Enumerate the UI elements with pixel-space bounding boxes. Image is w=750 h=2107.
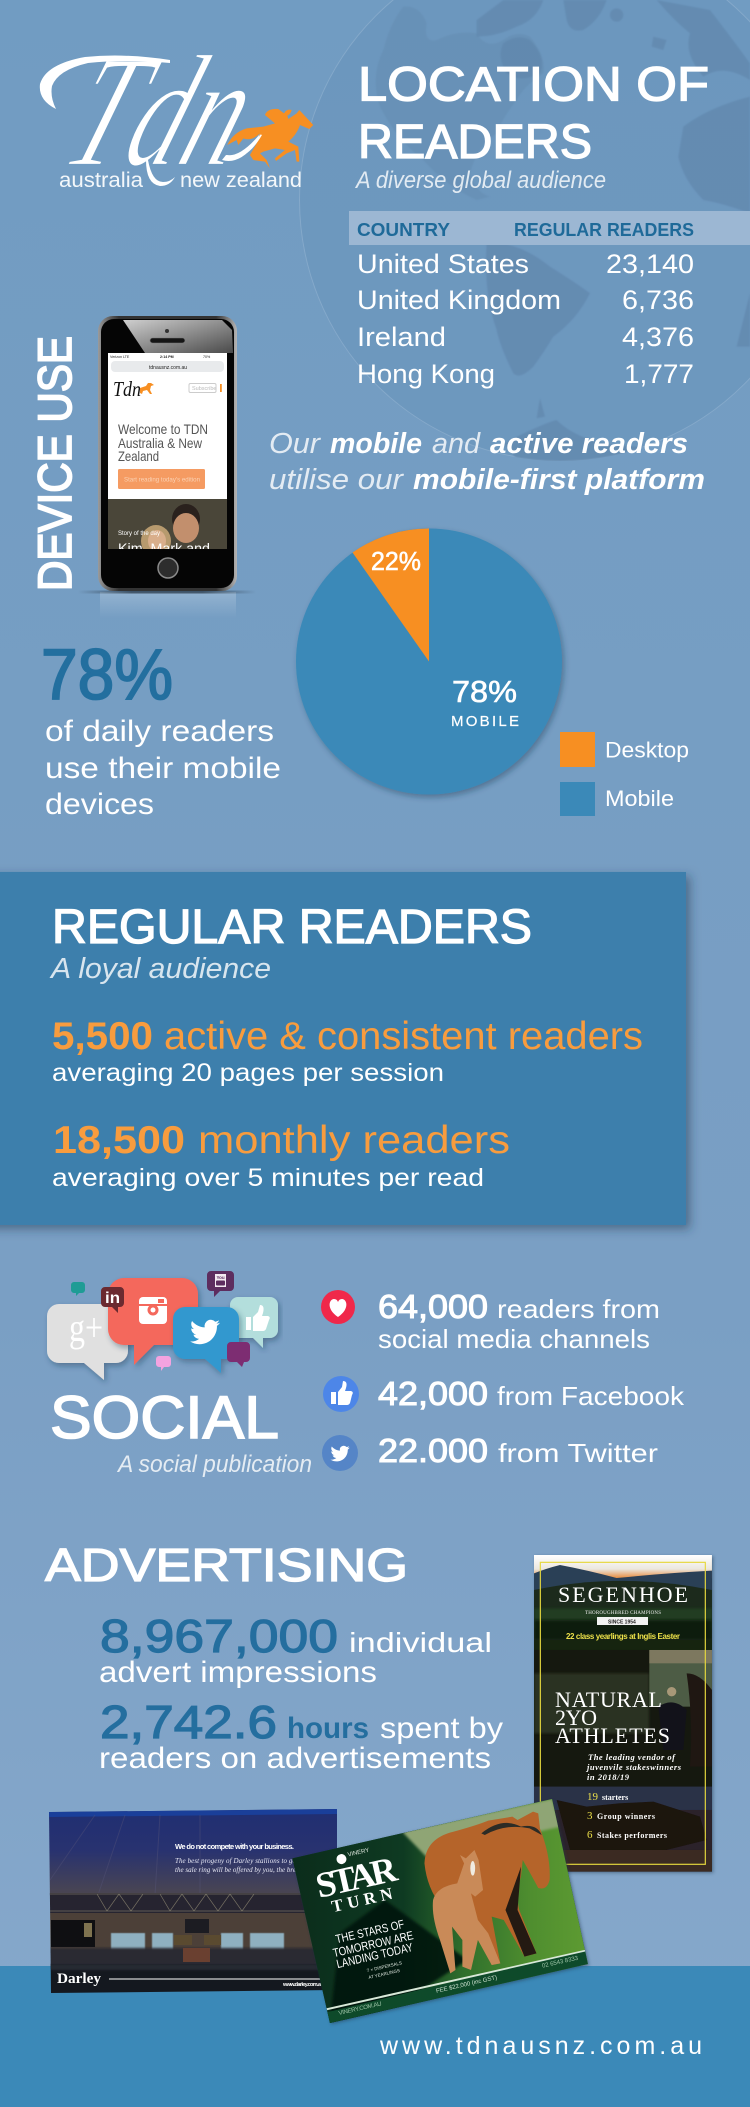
stat: active and consistent readers: averaging 20 pages per session bbox=[52, 1059, 444, 1087]
phone screen: Subscribe bbox=[192, 386, 216, 392]
table rows: United Kingdom bbox=[357, 285, 561, 315]
stat: advert impressions bbox=[99, 1610, 492, 1689]
darley text: We do not compete with your business. bbox=[175, 1842, 294, 1851]
pie label: 78% mobile bbox=[451, 674, 519, 730]
darley text: The best progeny of Darley stallions to go bbox=[175, 1857, 296, 1865]
heading: device use: DEVICE USE bbox=[28, 336, 81, 591]
segenhoe text: 3 bbox=[587, 1810, 593, 1822]
phone screen: Zealand bbox=[118, 448, 159, 464]
text: 22.000 from twitter bbox=[378, 1432, 658, 1469]
pie chart: desktop vs mobile bbox=[296, 528, 562, 794]
pie: desktop slice bbox=[352, 528, 429, 662]
callout: our mobile and active readers: and bbox=[432, 428, 481, 460]
stat: monthly readers: 18,500 bbox=[53, 1119, 185, 1162]
phone screen: tdnausnz.com.au bbox=[149, 365, 187, 371]
star turn text: VINERY.COM.AU bbox=[338, 2001, 382, 2017]
bubble: linkedin bbox=[101, 1287, 124, 1313]
table rows: 4,376 bbox=[622, 322, 694, 352]
table header bar: REGULAR READERS bbox=[514, 219, 694, 240]
logo wordmark: Tdn bbox=[45, 23, 280, 200]
stat: advert impressions: 8,967,000 bbox=[100, 1610, 338, 1662]
segenhoe text: ATHLETES bbox=[555, 1723, 670, 1748]
phone body bbox=[98, 316, 237, 591]
phone floor shadow bbox=[78, 590, 256, 594]
star turn text: FEE $22,000 (inc GST) bbox=[436, 1975, 498, 1995]
stat: 78% of daily readers bbox=[41, 636, 281, 821]
panel background bbox=[0, 872, 686, 1225]
segenhoe text: juvenvile stakeswinners bbox=[585, 1762, 682, 1772]
heading: regular readers: REGULAR READERS bbox=[52, 901, 532, 954]
bubble: google plus bbox=[47, 1304, 128, 1380]
heading: location of readers: READERS bbox=[358, 116, 592, 169]
phone screen: Start reading today's edition bbox=[124, 476, 200, 484]
pie: mobile slice bbox=[296, 528, 562, 794]
darley text: Darley bbox=[57, 1971, 101, 1987]
stat: monthly readers: averaging over 5 minutes per read bbox=[52, 1164, 484, 1192]
text: 64,000 readers bbox=[378, 1288, 660, 1354]
stat: 78% of daily readers: devices bbox=[45, 788, 154, 821]
darley text bbox=[57, 1842, 322, 1988]
callout: our mobile and active readers bbox=[269, 428, 705, 496]
heading: advertising: ADVERTISING bbox=[45, 1539, 408, 1591]
phone illustration bbox=[78, 316, 256, 618]
star turn text: THE STARS OF bbox=[334, 1917, 406, 1946]
bubble: pink bbox=[156, 1356, 171, 1371]
legend: Mobile bbox=[605, 786, 674, 811]
star turn text: AT YEARLINGS bbox=[368, 1968, 400, 1980]
stat: advert impressions: advert impressions bbox=[99, 1656, 377, 1689]
stat: hours on advertisements: readers on advertisements bbox=[99, 1742, 491, 1775]
advert: darley bbox=[45, 1805, 340, 1996]
bubble: instagram bbox=[108, 1278, 198, 1365]
logo: TDN australia new zealand bbox=[40, 23, 313, 200]
segenhoe text: 19 bbox=[587, 1791, 598, 1803]
darley text: the sale ring will be offered by you, the bre bbox=[175, 1866, 296, 1874]
icon: orange racehorse and jockey bbox=[227, 109, 313, 168]
advert: segenhoe bbox=[534, 1555, 712, 1872]
text: 64,000 readers: social media channels bbox=[378, 1324, 650, 1354]
legend bbox=[560, 732, 689, 816]
pie label: 78% mobile: MOBILE bbox=[451, 713, 519, 730]
icon: heart bbox=[321, 1290, 355, 1324]
stat: active and consistent readers bbox=[52, 1015, 643, 1087]
table rows: 23,140 bbox=[606, 249, 694, 279]
star turn text: VINERY bbox=[347, 1848, 370, 1858]
callout: our mobile and active readers: mobile-first platform bbox=[413, 464, 705, 496]
phone screen: Welcome to TDN bbox=[118, 421, 208, 437]
darley artwork bbox=[45, 1805, 340, 1996]
segenhoe text: SINCE 1954 bbox=[608, 1620, 636, 1626]
logo: new zealand: new zealand bbox=[180, 169, 302, 192]
text: 64,000 readers: readers from bbox=[497, 1294, 660, 1324]
heading: location of readers: LOCATION OF bbox=[358, 58, 709, 112]
phone screen: Tdn bbox=[113, 377, 141, 401]
phone screen: Australia & New bbox=[118, 435, 203, 451]
text: 22.000 from twitter: from Twitter bbox=[498, 1438, 658, 1468]
table rows: Ireland bbox=[357, 322, 446, 352]
star turn photo artwork bbox=[288, 1797, 592, 2027]
stat: advert impressions: individual bbox=[349, 1627, 492, 1658]
stat: hours on advertisements: spent by bbox=[380, 1712, 503, 1745]
stat: active and consistent readers: active & consistent readers bbox=[164, 1015, 643, 1058]
phone screen: Story of the day bbox=[118, 531, 160, 537]
stat: social media readers bbox=[321, 1288, 660, 1354]
footer: website url: www.tdnausnz.com.au bbox=[379, 2032, 702, 2060]
table header bar: COUNTRY bbox=[357, 219, 451, 240]
icon: facebook like bbox=[323, 1376, 359, 1412]
phone screen: 2:14 PM bbox=[160, 355, 174, 359]
footer band bbox=[0, 1966, 750, 2107]
globe map background bbox=[299, 0, 750, 467]
icon: twitter bbox=[322, 1435, 358, 1471]
text: 42,000 from facebook bbox=[378, 1375, 685, 1412]
bubble: twitter bbox=[173, 1307, 239, 1373]
star turn text bbox=[304, 1808, 580, 2017]
table header bar bbox=[349, 211, 750, 245]
phone screen: Verizon LTE bbox=[110, 355, 130, 359]
logo: australia: australia bbox=[59, 169, 143, 192]
bubble: thumbs up bbox=[230, 1297, 278, 1348]
callout: our mobile and active readers: active readers bbox=[490, 428, 688, 460]
stat: 78% of daily readers: of daily readers bbox=[45, 715, 274, 748]
pie label: 78% mobile: 78% bbox=[452, 674, 517, 709]
advert: star turn bbox=[288, 1797, 592, 2027]
phone reflection bbox=[100, 592, 236, 618]
segenhoe text: The leading vendor of bbox=[588, 1752, 676, 1762]
table rows bbox=[357, 249, 694, 389]
stat: monthly readers bbox=[52, 1119, 510, 1192]
segenhoe text: 2YO bbox=[555, 1705, 597, 1730]
star turn text: TURN bbox=[330, 1884, 395, 1916]
bubble: youtube bbox=[207, 1271, 234, 1297]
star turn text: 02 6543 8333 bbox=[542, 1956, 579, 1970]
segenhoe text: 6 bbox=[587, 1829, 593, 1841]
phone screen: 70% bbox=[203, 355, 211, 359]
phone screen bbox=[108, 353, 227, 557]
bubble: teal bbox=[71, 1282, 85, 1296]
table rows: United States bbox=[357, 249, 529, 279]
stat: twitter readers bbox=[322, 1432, 658, 1471]
segenhoe text: THOROUGHBRED CHAMPIONS bbox=[585, 1611, 661, 1616]
stat: active and consistent readers: 5,500 bbox=[52, 1015, 153, 1058]
stat: 78% of daily readers: use their mobile bbox=[45, 752, 281, 785]
pie label: 22%: 22% bbox=[371, 546, 421, 576]
star turn text: TOMORROW ARE bbox=[332, 1928, 415, 1960]
section: location of readers bbox=[349, 58, 750, 389]
segenhoe text: Stakes performers bbox=[597, 1831, 667, 1840]
heading: location of readers bbox=[358, 58, 709, 169]
star turn text: 7 × DISPERSALS bbox=[366, 1960, 402, 1973]
bubble: youtube: You bbox=[216, 1275, 225, 1280]
bubble: linkedin: in bbox=[105, 1290, 120, 1307]
heading: social: SOCIAL bbox=[50, 1384, 279, 1451]
panel: regular readers bbox=[0, 872, 686, 1225]
table rows: 6,736 bbox=[622, 285, 694, 315]
bubble: purple bbox=[227, 1342, 250, 1367]
bubble: google plus: g+ bbox=[69, 1305, 103, 1350]
phone screen: Kim, Mark and bbox=[118, 540, 210, 556]
segenhoe text: SEGENHOE bbox=[558, 1582, 688, 1607]
segenhoe text: Group winners bbox=[597, 1812, 655, 1821]
logo swash bbox=[40, 56, 261, 186]
callout: our mobile and active readers: utilise our bbox=[269, 464, 404, 496]
table rows: Hong Kong bbox=[357, 359, 495, 389]
segenhoe artwork bbox=[534, 1555, 712, 1872]
subheading: a social publication: A social publication bbox=[116, 1451, 312, 1478]
star turn text: LANDING TODAY bbox=[335, 1940, 414, 1971]
stat: 78% of daily readers: 78% bbox=[41, 636, 173, 715]
table rows: 1,777 bbox=[624, 359, 694, 389]
segenhoe text: NATURAL bbox=[555, 1687, 662, 1712]
callout: our mobile and active readers: Our bbox=[269, 428, 321, 460]
subheading: A diverse global audience bbox=[354, 167, 606, 194]
text: 42,000 from facebook: from Facebook bbox=[497, 1381, 685, 1411]
segenhoe text: in 2018/19 bbox=[587, 1772, 630, 1782]
stat: hours on advertisements bbox=[99, 1696, 503, 1775]
callout: our mobile and active readers: mobile bbox=[330, 428, 422, 460]
legend: Desktop bbox=[605, 738, 689, 762]
stat: hours on advertisements: 2,742.6 bbox=[100, 1696, 277, 1748]
text: 64,000 readers: 64,000 bbox=[378, 1288, 488, 1325]
segenhoe text bbox=[555, 1582, 688, 1841]
darley text: www.darley.com.a bbox=[282, 1982, 322, 1988]
subheading: a loyal audience: A loyal audience bbox=[49, 953, 271, 985]
icon: social media speech bubbles bbox=[47, 1271, 278, 1380]
segenhoe text: 22 class yearlings at Inglis Easter bbox=[566, 1632, 680, 1641]
text: 22.000 from twitter: 22.000 bbox=[378, 1432, 488, 1469]
stat: monthly readers: monthly readers bbox=[198, 1119, 510, 1162]
text: 42,000 from facebook: 42,000 bbox=[378, 1375, 488, 1412]
stat: facebook readers bbox=[323, 1375, 685, 1412]
stat: hours on advertisements: hours bbox=[287, 1712, 369, 1745]
star turn text: STAR bbox=[312, 1848, 402, 1906]
segenhoe text: starters bbox=[602, 1793, 628, 1802]
